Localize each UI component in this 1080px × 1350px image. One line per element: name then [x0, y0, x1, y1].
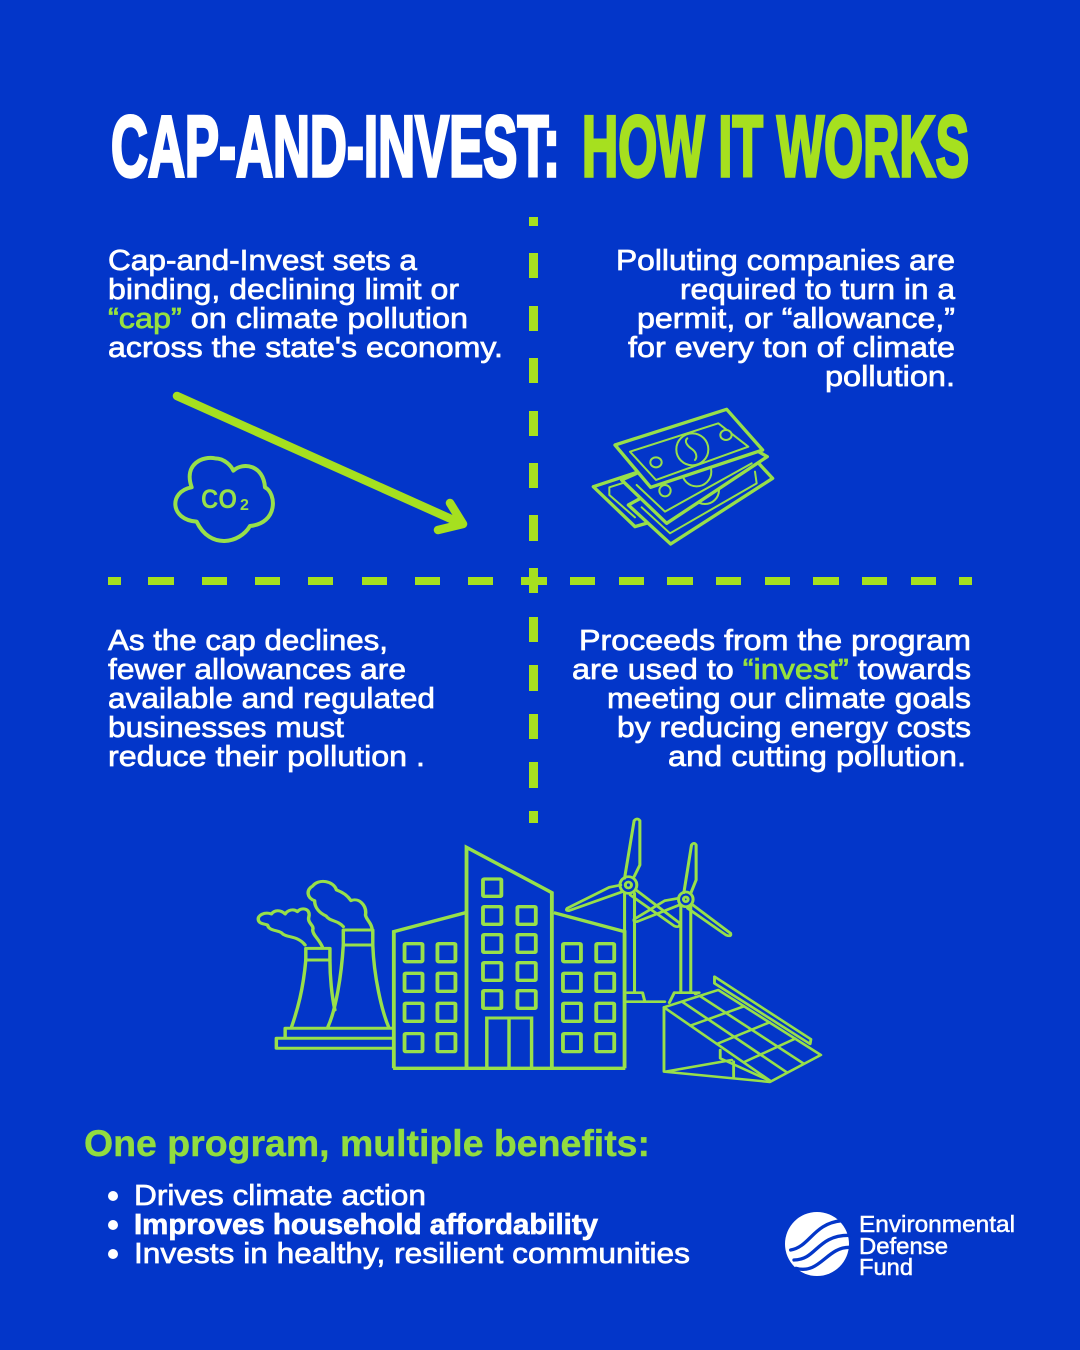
logo: Environmental Defense Fund	[785, 1211, 1015, 1280]
icon: apartment building	[393, 847, 625, 1068]
icon: declining arrow	[177, 396, 463, 530]
text block: proceeds invested: meeting our climate goals	[607, 683, 971, 715]
text block: allowances explanation: Polluting companies are	[616, 245, 955, 277]
title: CAP-AND-INVEST:	[111, 99, 560, 195]
text block: cap explanation: across the state's economy.	[108, 332, 503, 364]
text block: proceeds invested: Proceeds from the program	[579, 625, 971, 657]
text block: allowances explanation: pollution.	[825, 361, 955, 393]
icon: cooling towers with smoke	[258, 881, 392, 1048]
heading: benefits: One program, multiple benefits:	[84, 1123, 650, 1164]
list: benefits: Drives climate action	[134, 1180, 426, 1212]
text block: declining allowances: reduce their pollution .	[108, 741, 425, 773]
text block: cap explanation: Cap-and-Invest sets a	[108, 245, 418, 277]
icon: wind turbines	[567, 819, 731, 1003]
icon: solar panel	[664, 977, 821, 1082]
text block: allowances explanation: required to turn in a	[680, 274, 956, 306]
text block: cap explanation	[108, 245, 503, 364]
text block: declining allowances: fewer allowances are	[108, 654, 406, 686]
list: benefits	[108, 1180, 690, 1270]
icon: CO2 cloud: 2	[240, 497, 249, 514]
list: benefits: Invests in healthy, resilient communities	[134, 1238, 690, 1270]
text block: proceeds invested: by reducing energy costs	[617, 712, 971, 744]
text block: cap explanation: “cap” on climate pollution	[108, 303, 468, 335]
text block: declining allowances	[108, 625, 435, 773]
text block: allowances explanation: permit, or “allowance,”	[637, 303, 955, 335]
logo: Environmental Defense Fund: Environmental	[859, 1211, 1015, 1237]
text block: declining allowances: As the cap declines,	[108, 625, 388, 657]
icon: stack of money	[593, 409, 773, 544]
text block: declining allowances: businesses must	[108, 712, 344, 744]
text block: proceeds invested: and cutting pollution.	[668, 741, 966, 773]
logo: Environmental Defense Fund: Fund	[859, 1254, 913, 1280]
icon: CO2 cloud	[175, 458, 273, 541]
logo: Environmental Defense Fund: Defense	[859, 1233, 948, 1259]
icon: CO2 cloud: CO	[201, 484, 237, 514]
illustration: city with power plant, wind turbines and solar panel	[258, 819, 821, 1082]
text block: allowances explanation: for every ton of climate	[628, 332, 955, 364]
text block: cap explanation: binding, declining limit or	[108, 274, 459, 306]
text block: allowances explanation	[616, 245, 956, 393]
text block: declining allowances: available and regulated	[108, 683, 435, 715]
list: benefits: Improves household affordability	[134, 1209, 598, 1241]
text block: proceeds invested	[572, 625, 971, 773]
text block: proceeds invested: are used to “invest” towards	[572, 654, 971, 686]
